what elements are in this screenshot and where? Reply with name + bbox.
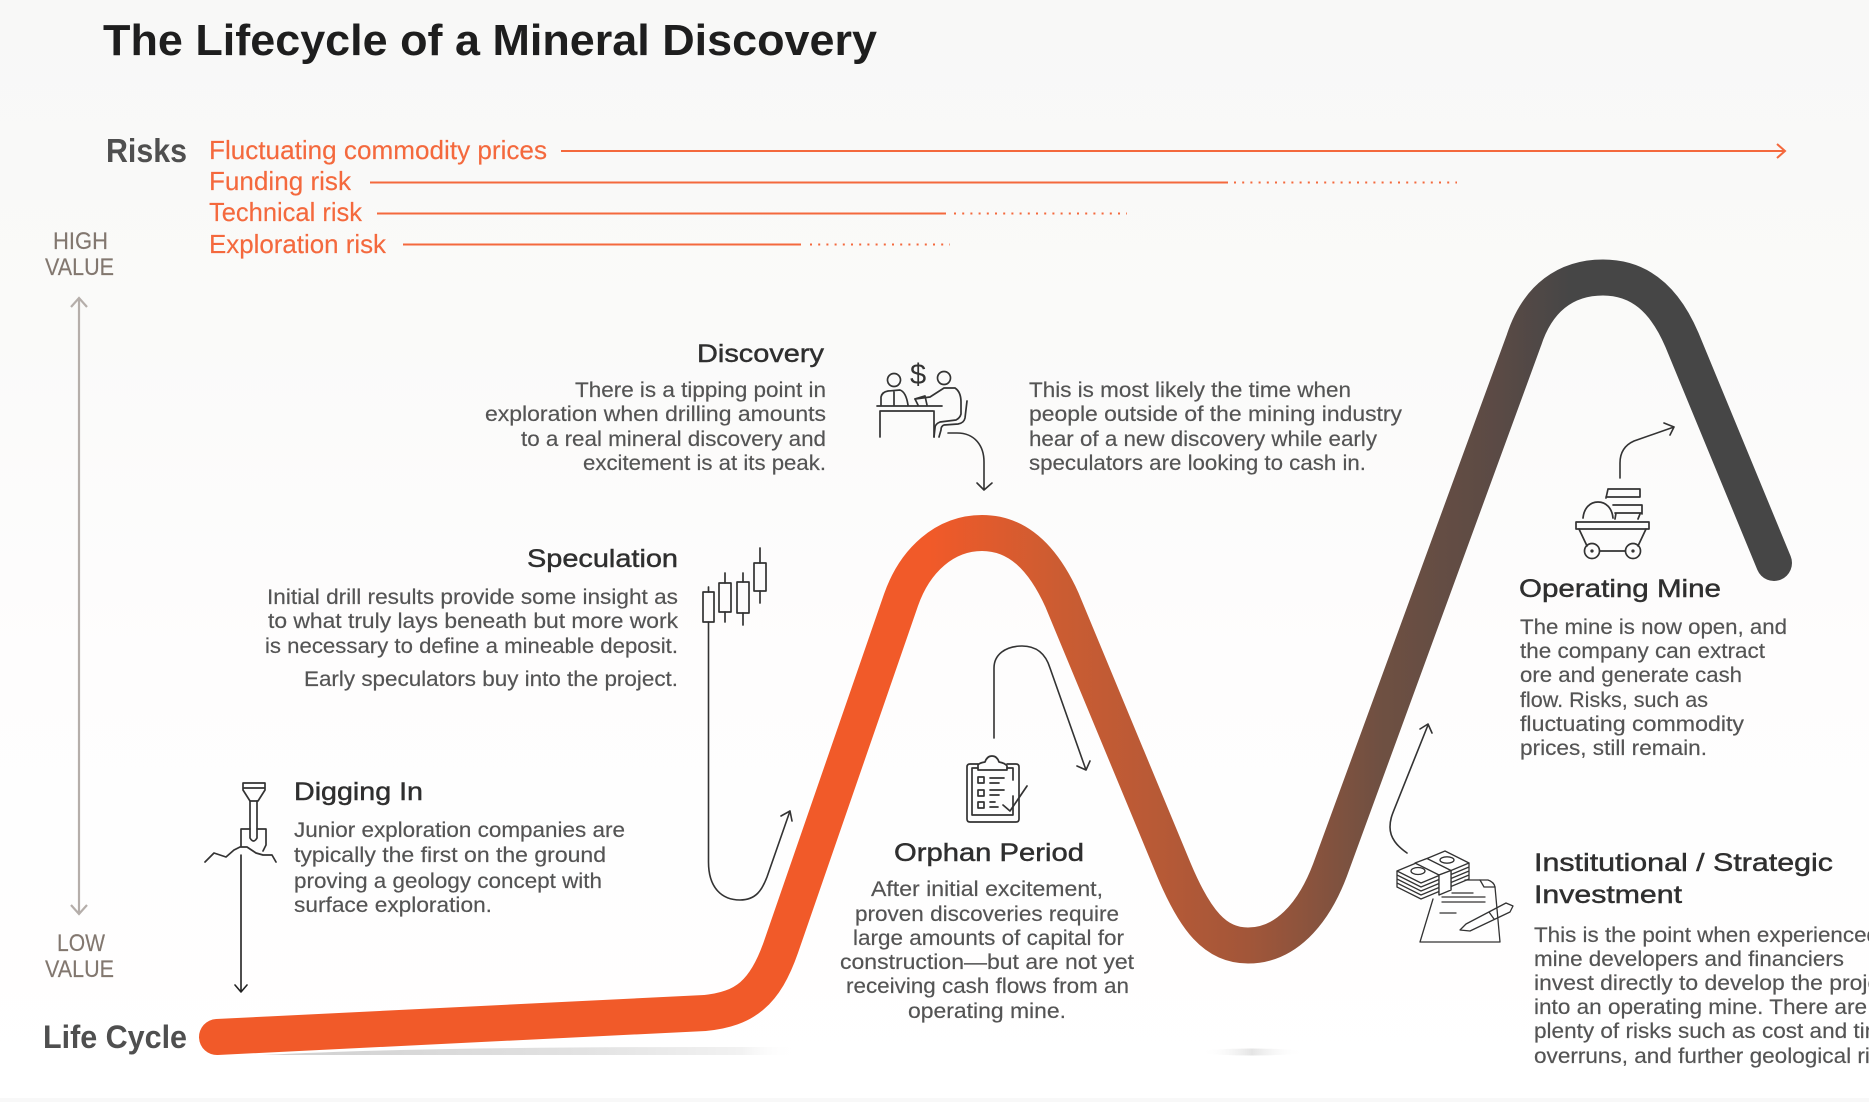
icon: money and contract [1397,851,1513,942]
text block: fluctuating commodity [1520,713,1745,736]
title: The Lifecycle of a Mineral Discovery [103,16,878,65]
heading [1534,849,1833,909]
arrow: from clipboard to curve [994,646,1090,770]
text block: construction—but are not yet [840,951,1134,974]
low value label [45,930,114,983]
text block [1534,924,1869,1068]
panel: institutional / strategic investment [1390,724,1869,1068]
text block: prices, still remain. [1520,737,1707,760]
text block: left: to a real mineral discovery and [521,428,826,451]
heading: Digging In [294,778,423,806]
icon: candlesticks [703,548,766,625]
arrow: down to curve [235,855,247,992]
high value label: HIGH [53,228,108,255]
life cycle label: Life Cycle [43,1019,187,1055]
text block: operating mine. [908,1000,1066,1023]
text block: right: hear of a new discovery while early [1029,428,1378,451]
risk: fluctuating commodity prices: Fluctuating commodity prices [209,135,547,165]
panel: discovery [485,340,1403,490]
risk: exploration risk: Exploration risk [209,229,387,259]
text block: the company can extract [1520,640,1765,663]
bottom band [0,1098,1869,1102]
text block: Early speculators buy into the project. [304,668,678,691]
text block: left: There is a tipping point in [575,379,826,402]
text block: right [1029,379,1403,475]
text block: mine developers and financiers [1534,948,1844,971]
panel: speculation [265,545,792,900]
risks label: Risks [106,132,187,169]
text block [840,878,1134,1023]
risk: technical risk: Technical risk [209,197,363,227]
panel: risks [106,132,1785,259]
low value label: LOW [57,930,105,957]
text block: proven discoveries require [855,903,1119,926]
text block: Junior exploration companies are [294,819,625,842]
heading: Speculation [527,545,678,573]
value arrow [71,298,87,914]
panel: orphan period [840,646,1134,1023]
arrow: up to curve [708,622,792,900]
text block: This is the point when experienced [1534,924,1869,947]
arrow: down to peak [948,433,992,490]
heading: Operating Mine [1519,575,1721,603]
icon: mine cart [1576,489,1649,558]
text block: ore and generate cash [1520,664,1742,687]
text block: surface exploration. [294,894,492,917]
heading: Institutional / Strategic [1534,849,1833,877]
high value label: VALUE [45,254,114,281]
text block: invest directly to develop the project [1534,972,1869,995]
curve shadows [262,1047,1302,1056]
icon: dollar sign: $ [910,359,926,391]
text block: flow. Risks, such as [1520,689,1708,712]
text block: is necessary to define a mineable deposit. [265,635,678,658]
text block: The mine is now open, and [1520,616,1787,639]
text block: Initial drill results provide some insight as [267,586,678,609]
low value label: VALUE [45,956,114,983]
text block: right: speculators are looking to cash in. [1029,452,1366,475]
text block: typically the first on the ground [294,844,606,867]
text block: plenty of risks such as cost and time [1534,1020,1869,1043]
text block: proving a geology concept with [294,870,602,893]
icon: people at desk [877,372,967,437]
icon: shovel [205,783,276,862]
text block: left: exploration when drilling amounts [485,403,826,426]
risk: funding risk: Funding risk [209,166,352,196]
text block [265,586,679,691]
value axis [45,228,114,983]
text block: into an operating mine. There are [1534,996,1867,1019]
text block: large amounts of capital for [853,927,1124,950]
panel: digging in [205,778,625,992]
text block: to what truly lays beneath but more work [268,610,679,633]
panel: operating mine [1519,423,1787,760]
text block [294,819,625,917]
text block: receiving cash flows from an [846,975,1129,998]
heading: Orphan Period [894,839,1084,867]
icon: clipboard [967,756,1027,822]
arrow: up to curve [1390,724,1432,853]
arrow: up to curve [1620,423,1674,478]
text block: right: This is most likely the time when [1029,379,1351,402]
risk: fluctuating commodity prices [209,135,1785,165]
heading: Investment [1534,881,1682,909]
text block: left [485,379,826,475]
text block: left: excitement is at its peak. [583,452,826,475]
text block: After initial excitement, [871,878,1103,901]
life cycle curve [217,278,1774,1037]
high value label [45,228,114,281]
heading: Discovery [697,340,825,368]
text block [1520,616,1787,760]
text block: right: people outside of the mining industry [1029,403,1403,426]
